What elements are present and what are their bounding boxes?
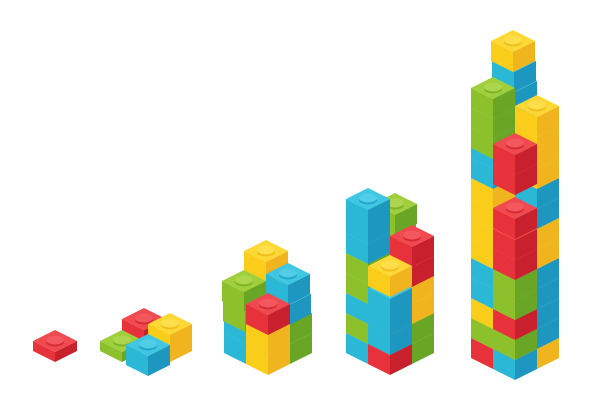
stack 5: tallest tower [471, 30, 559, 380]
stack 4: taller tower [346, 188, 434, 375]
stack 1: single red plate [33, 330, 77, 362]
stack 2: four bricks on the ground [100, 308, 192, 376]
stack 3: two-layer block [222, 240, 312, 375]
